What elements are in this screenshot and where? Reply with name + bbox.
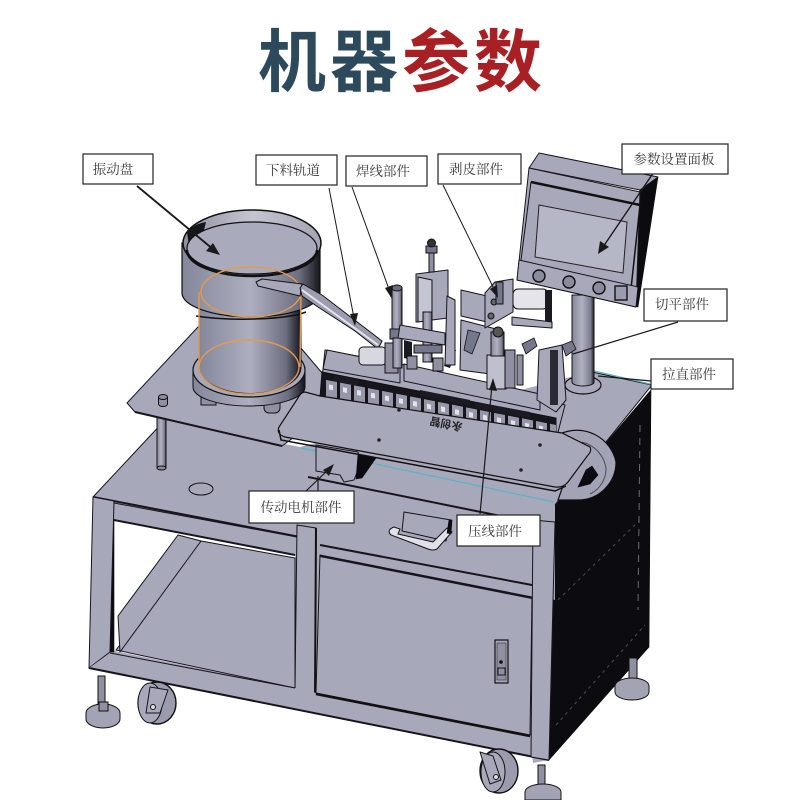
bottom rail [89,653,549,763]
panel buttons [533,270,627,300]
arrow: feed track [329,188,358,326]
white roller [512,289,552,328]
bowl rim [183,210,321,276]
cabinet dark side [549,390,651,760]
control strip [517,260,638,307]
label: straightening [651,359,733,389]
arrow: vibration bowl [137,186,220,255]
label: motor: 传动电机部件 [260,499,342,515]
door lock [495,640,508,683]
drawer handle [389,512,452,550]
center cylinder [487,327,515,389]
arrow: welding [352,187,393,299]
label: straightening: 拉直部件 [662,366,716,382]
feed track [256,279,382,349]
cabinet top surface [93,372,652,600]
screen bezel [521,182,640,289]
label: stripping: 剥皮部件 [449,161,503,177]
work plate [278,392,591,491]
label: welding: 焊线部件 [356,163,410,179]
label: motor [249,491,354,523]
mechanism assembly [320,239,576,447]
welding post [390,285,404,368]
upper left plate [127,327,345,470]
cabinet front [89,497,555,760]
arrow: straightening [598,376,651,381]
top cylinder [416,239,455,365]
label: welding [346,156,427,186]
left leg [89,497,114,668]
label: vibration bowl [83,154,153,184]
rear blocks [460,290,500,375]
arrow: stripping [443,185,498,298]
brand mark: 永创智 [428,414,464,434]
stripping block [485,279,513,328]
title: 机器参数 [258,25,546,101]
label: vibration bowl: 振动盘 [93,161,134,177]
arrow: pressing [480,378,497,514]
label: pressing: 压线部件 [468,523,522,539]
silver roller [359,343,398,373]
bowl feet [201,393,280,413]
label: settings panel [622,144,728,174]
label: feed track [256,155,337,185]
blue seam lines [301,370,650,502]
screen [535,205,627,273]
left foot and caster [86,676,176,728]
motor bracket [316,445,376,482]
label: pressing [457,515,540,546]
middle post [398,312,445,371]
vibration bowl [182,210,321,413]
machine cabinet [89,370,652,763]
column [199,300,301,394]
dark slots on rail [332,340,530,418]
arrow: motor [306,464,334,491]
label: settings panel: 参数设置面板 [634,151,715,167]
arrow: settings panel [598,163,660,254]
label: cutting [644,289,727,321]
arrow: cutting [573,322,678,354]
curved belt guard [558,430,616,500]
left opening with shelf [108,503,297,688]
base disk [193,370,305,406]
label: stripping [438,154,521,184]
right foot and caster [480,749,561,800]
door panel [316,555,532,735]
table hole [189,483,213,495]
right assembly [517,338,576,412]
orange outline [199,267,301,394]
pressing blocks with white dots [326,380,556,447]
operating panel [517,153,658,307]
right leg [531,520,555,760]
control pole [565,295,601,394]
back foot [615,658,649,700]
center post [295,525,316,696]
label: feed track: 下料轨道 [266,162,320,178]
bowl body [182,243,320,317]
back rails [320,350,565,440]
label: cutting: 切平部件 [655,297,709,312]
